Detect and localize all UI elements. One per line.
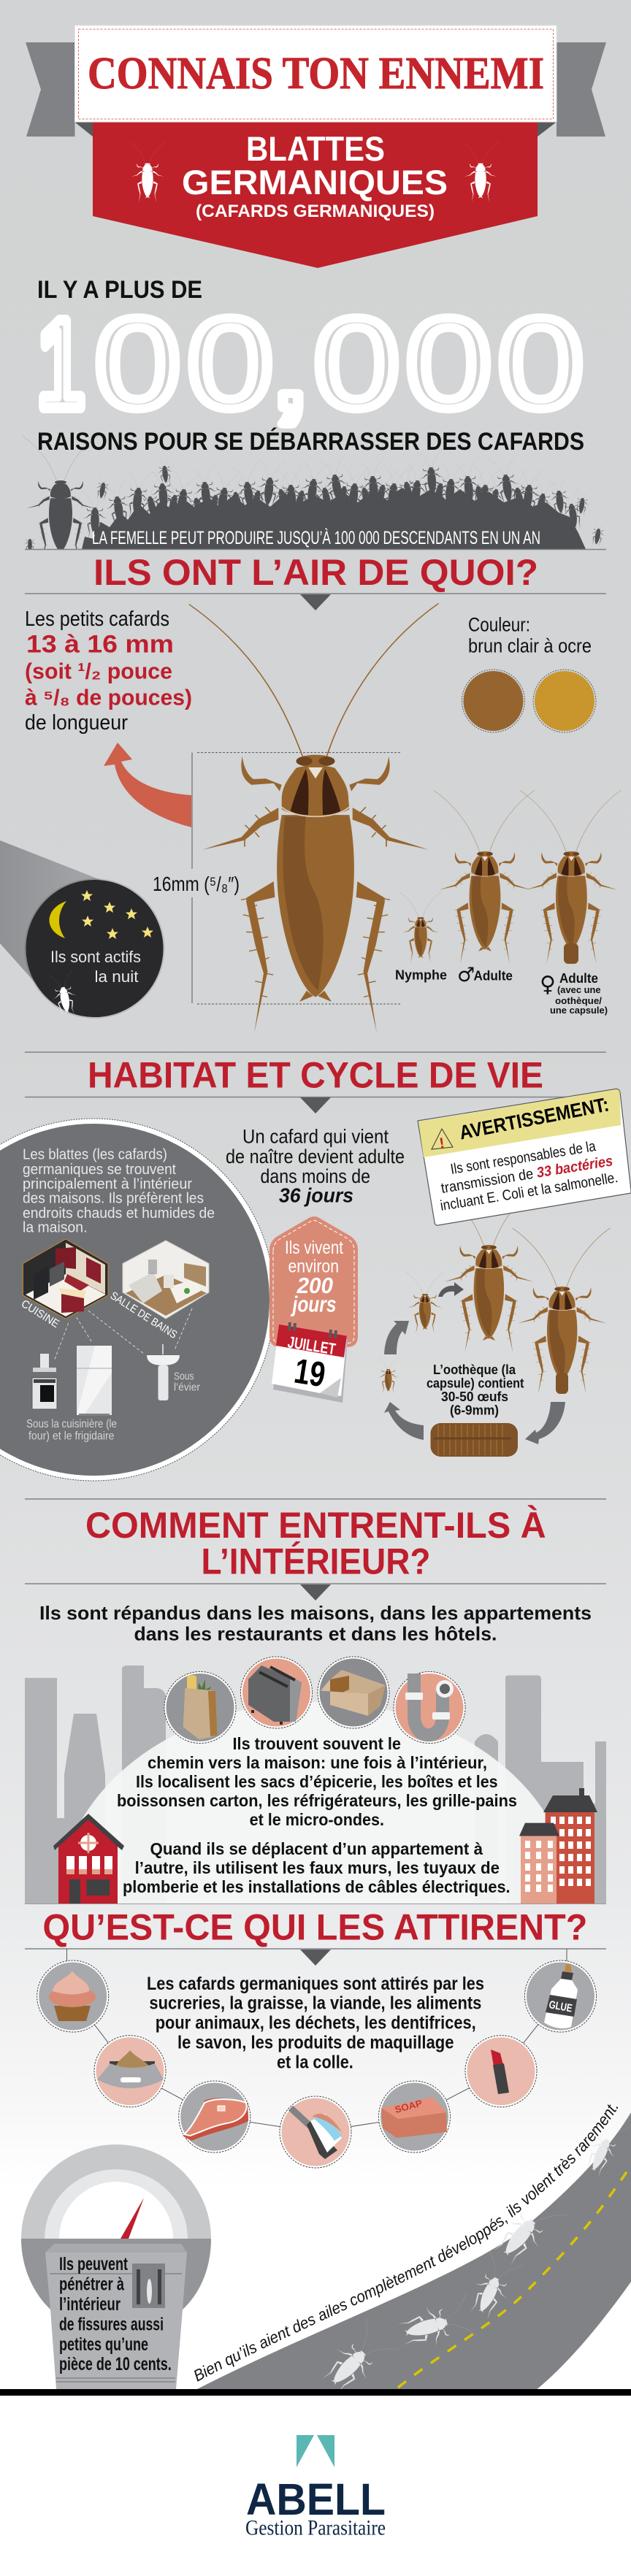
icon: toaster <box>241 1657 313 1728</box>
colour label: Couleur: <box>468 614 530 636</box>
icon: grocery bag <box>164 1672 236 1744</box>
habitat text: germaniques se trouvent <box>23 1162 176 1178</box>
habitat text: endroits chauds et humides de <box>23 1205 215 1222</box>
colour swatch: light brown <box>462 670 524 732</box>
ootheca text: L’oothèque (la <box>433 1362 516 1377</box>
entry body text: Ils localisent les sacs d’épicerie, les boîtes et les <box>136 1772 498 1791</box>
stage labels: (avec une <box>557 984 601 995</box>
arrow marker <box>300 1950 331 1966</box>
icon: red house <box>53 1814 124 1904</box>
stage labels: Adulte <box>473 968 513 983</box>
attractants text: pour animaux, les déchets, les dentifrices, <box>156 2013 476 2033</box>
entry body text <box>117 1734 517 1896</box>
stage labels <box>395 964 608 1016</box>
beam behind night circle <box>0 840 104 984</box>
meter text: de fissures aussi <box>59 2315 164 2335</box>
white dome <box>82 1702 546 1904</box>
entry body text: Ils trouvent souvent le <box>232 1734 401 1753</box>
icon: pet food bowl <box>94 2036 166 2107</box>
footer bar <box>0 2389 631 2396</box>
warning sign: AVERTISSEMENT: <box>457 1093 611 1143</box>
label: under the sink: l’évier <box>174 1381 200 1394</box>
main cockroach illustration <box>189 603 439 1032</box>
maturity text: Un cafard qui vient <box>242 1126 389 1148</box>
attractants text: sucreries, la graisse, la viande, les aliments <box>149 1993 481 2014</box>
label: under the oven and fridge: four) et le frigidaire <box>28 1430 115 1443</box>
dashed leader lines <box>54 1308 192 1360</box>
entry body text: chemin vers la maison: une fois à l’intérieur, <box>148 1753 487 1772</box>
meter text: l’intérieur <box>59 2294 121 2315</box>
meter text: Ils peuvent <box>59 2254 128 2274</box>
heading: entry <box>85 1505 546 1582</box>
coin slot <box>132 2263 165 2308</box>
icon: pink apartment tower <box>519 1823 559 1904</box>
stage labels: ♂ <box>457 964 475 986</box>
attractants text <box>147 1974 484 2073</box>
icon: range hood and oven <box>32 1354 57 1409</box>
ootheca text: 30-50 œufs <box>441 1389 508 1404</box>
icon: fridge <box>77 1346 112 1416</box>
tag: lifespan: Ils vivent <box>285 1238 343 1258</box>
size text block <box>25 607 192 735</box>
night activity circle <box>25 878 165 1019</box>
dimension label: 16mm (⁵/₈″) <box>153 873 240 895</box>
male adult cockroach <box>434 790 535 964</box>
tag: lifespan <box>269 1216 358 1347</box>
arrow marker <box>300 594 331 610</box>
icon: kitchen <box>23 1239 108 1319</box>
habitat text: la maison. <box>23 1219 88 1235</box>
meter text: pièce de 10 cents. <box>59 2354 172 2374</box>
header ribbon <box>26 26 606 268</box>
icon: bathroom <box>123 1241 209 1319</box>
big number 100,000: 00,000 <box>95 292 584 434</box>
title: CONNAIS TON ENNEMI <box>88 49 544 99</box>
attractants text: Les cafards germaniques sont attirés par les <box>147 1974 484 1994</box>
panel: habitat circle <box>0 1119 275 1481</box>
icon: soap bar: SOAP <box>394 2097 424 2115</box>
colour swatch: ochre <box>533 670 596 732</box>
icon: glue bottle: GLUE <box>548 1998 573 2015</box>
ootheca text: capsule) contient <box>427 1376 524 1391</box>
big number 100,000: 1 <box>37 295 85 434</box>
logo: Abell wordmark: Gestion Parasitaire <box>245 2516 386 2540</box>
cycle cockroach: female <box>513 1228 611 1394</box>
warning sign: transmission de 33 bactéries <box>440 1153 614 1197</box>
night activity circle: Ils sont actifs <box>50 948 141 966</box>
intro line: IL Y A PLUS DE <box>37 276 202 304</box>
entry intro text <box>39 1602 592 1645</box>
entry body text: plomberie et les installations de câbles électriques. <box>123 1877 510 1896</box>
entry body text: Quand ils se déplacent d’un appartement à <box>150 1839 483 1858</box>
heading: appearance: ILS ONT L’AIR DE QUOI? <box>93 552 538 593</box>
logo: Abell mark <box>297 2435 334 2467</box>
ootheca text: (6-9mm) <box>450 1403 499 1417</box>
entry body text: l’autre, ils utilisent les faux murs, les tuyaux de <box>135 1858 500 1877</box>
icon: calendar: JUILLET <box>286 1333 337 1358</box>
arrow marker <box>300 1097 331 1113</box>
size text block: Les petits cafards <box>25 607 169 631</box>
label: under the oven and fridge: Sous la cuisinière (le <box>26 1418 117 1430</box>
section divider lines <box>25 549 606 1949</box>
logo: Abell wordmark: ABELL <box>246 2475 386 2524</box>
road caption on curve: Bien qu’ils aient des ailes complètement développés, ils volent très rarement. <box>194 2104 618 2382</box>
habitat text <box>23 1146 215 1235</box>
icon: toothbrush <box>280 2096 351 2168</box>
entry intro text: dans les restaurants et dans les hôtels. <box>134 1623 497 1645</box>
meter text: pénétrer à <box>59 2274 124 2295</box>
subtitle <box>182 129 448 221</box>
habitat text: Les blattes (les cafards) <box>23 1146 167 1162</box>
size text block: (soit ¹/₂ pouce <box>25 659 172 684</box>
label: kitchen: CUISINE <box>19 1297 61 1330</box>
road <box>197 2112 631 2402</box>
label: bathroom: SALLE DE BAINS <box>108 1289 179 1341</box>
entry body text: boissonsen carton, les réfrigérateurs, les grille-pains <box>117 1791 517 1810</box>
heading: habitat: HABITAT ET CYCLE DE VIE <box>88 1054 543 1095</box>
ootheca text <box>427 1362 524 1417</box>
colour label: brun clair à ocre <box>468 635 592 657</box>
icon: drain pipe <box>394 1672 465 1744</box>
icon: sink <box>147 1344 180 1400</box>
habitat text: des maisons. Ils préfèrent les <box>23 1191 204 1207</box>
icon: egg capsule <box>431 1423 518 1457</box>
label: under the oven and fridge <box>26 1418 117 1443</box>
meter text: petites qu’une <box>59 2334 148 2355</box>
attractants text: le savon, les produits de maquillage <box>177 2033 454 2053</box>
label: under the sink: Sous <box>174 1371 194 1383</box>
icon: red apartment tower <box>543 1788 597 1904</box>
tag: lifespan: jours <box>290 1292 336 1317</box>
maturity text <box>226 1126 405 1206</box>
city skyline <box>25 1665 606 1904</box>
entry body text: et le micro-ondes. <box>250 1810 384 1829</box>
warning sign <box>418 1089 631 1225</box>
icon: cupcake <box>37 1960 109 2032</box>
heading: entry: L’INTÉRIEUR? <box>202 1541 431 1582</box>
subtitle: (CAFARDS GERMANIQUES) <box>196 202 435 221</box>
dimension lines <box>192 753 402 1004</box>
meter text <box>59 2254 172 2374</box>
big number 100,000: 1 <box>37 295 85 434</box>
nymph cockroach <box>399 892 441 963</box>
cycle cockroach: adult <box>440 1187 537 1352</box>
size text block: à ⁵/₈ de pouces) <box>25 685 192 710</box>
connector chain <box>67 1949 567 2132</box>
cycle cockroach: hatchling <box>377 1355 399 1394</box>
stage labels: ♀ <box>540 972 556 997</box>
female adult cockroach with capsule <box>520 790 622 964</box>
icon: lipstick <box>465 2036 537 2107</box>
icon: soap bar <box>378 2081 450 2153</box>
icon: cardboard box <box>318 1657 389 1728</box>
label: under the sink <box>174 1371 200 1394</box>
subtitle: BLATTES <box>246 129 385 168</box>
entry intro text: Ils sont répandus dans les maisons, dans les appartements <box>39 1602 592 1624</box>
heading: attractants: QU’EST-CE QUI LES ATTIRENT? <box>42 1907 587 1948</box>
colour label <box>468 614 592 657</box>
cycle arrows <box>384 1282 565 1444</box>
maturity text: 36 jours <box>279 1184 353 1206</box>
maturity text: de naître devient adulte <box>226 1146 405 1168</box>
arrow marker <box>300 1584 331 1601</box>
arrow: coral curved <box>104 743 191 827</box>
stage labels: Nymphe <box>395 968 447 983</box>
icon: steak <box>179 2081 251 2153</box>
stage labels: une capsule) <box>550 1005 608 1016</box>
size text block: de longueur <box>25 711 128 735</box>
stage labels: Adulte <box>559 971 598 986</box>
icon: glue bottle <box>524 1960 596 2032</box>
icon: white cockroach right <box>462 142 498 202</box>
tag: lifespan: 200 <box>297 1273 333 1298</box>
icon: white cockroach left <box>129 142 165 202</box>
big number 100,000: 00,000 <box>95 292 584 434</box>
icon: calendar <box>272 1322 348 1403</box>
warning sign: Ils sont responsables de la <box>449 1138 597 1178</box>
warning sign: ! <box>438 1135 445 1151</box>
icon: calendar: 19 <box>291 1352 328 1395</box>
stage labels: oothèque/ <box>555 995 602 1006</box>
attractants text: et la colle. <box>277 2052 353 2073</box>
cockroach crowd silhouette <box>23 436 608 562</box>
subtitle: GERMANIQUES <box>182 163 448 202</box>
road cockroaches <box>313 2114 631 2402</box>
cycle cockroach: nymph <box>406 1272 444 1334</box>
maturity text: dans moins de <box>260 1165 370 1187</box>
size text block: 13 à 16 mm <box>26 631 174 659</box>
habitat text: principalement à l’intérieur <box>23 1176 192 1192</box>
parking meter <box>21 2144 211 2389</box>
heading: entry: COMMENT ENTRENT-ILS À <box>85 1505 546 1546</box>
night activity circle: la nuit <box>95 967 139 986</box>
tag: lifespan: environ <box>288 1256 339 1276</box>
